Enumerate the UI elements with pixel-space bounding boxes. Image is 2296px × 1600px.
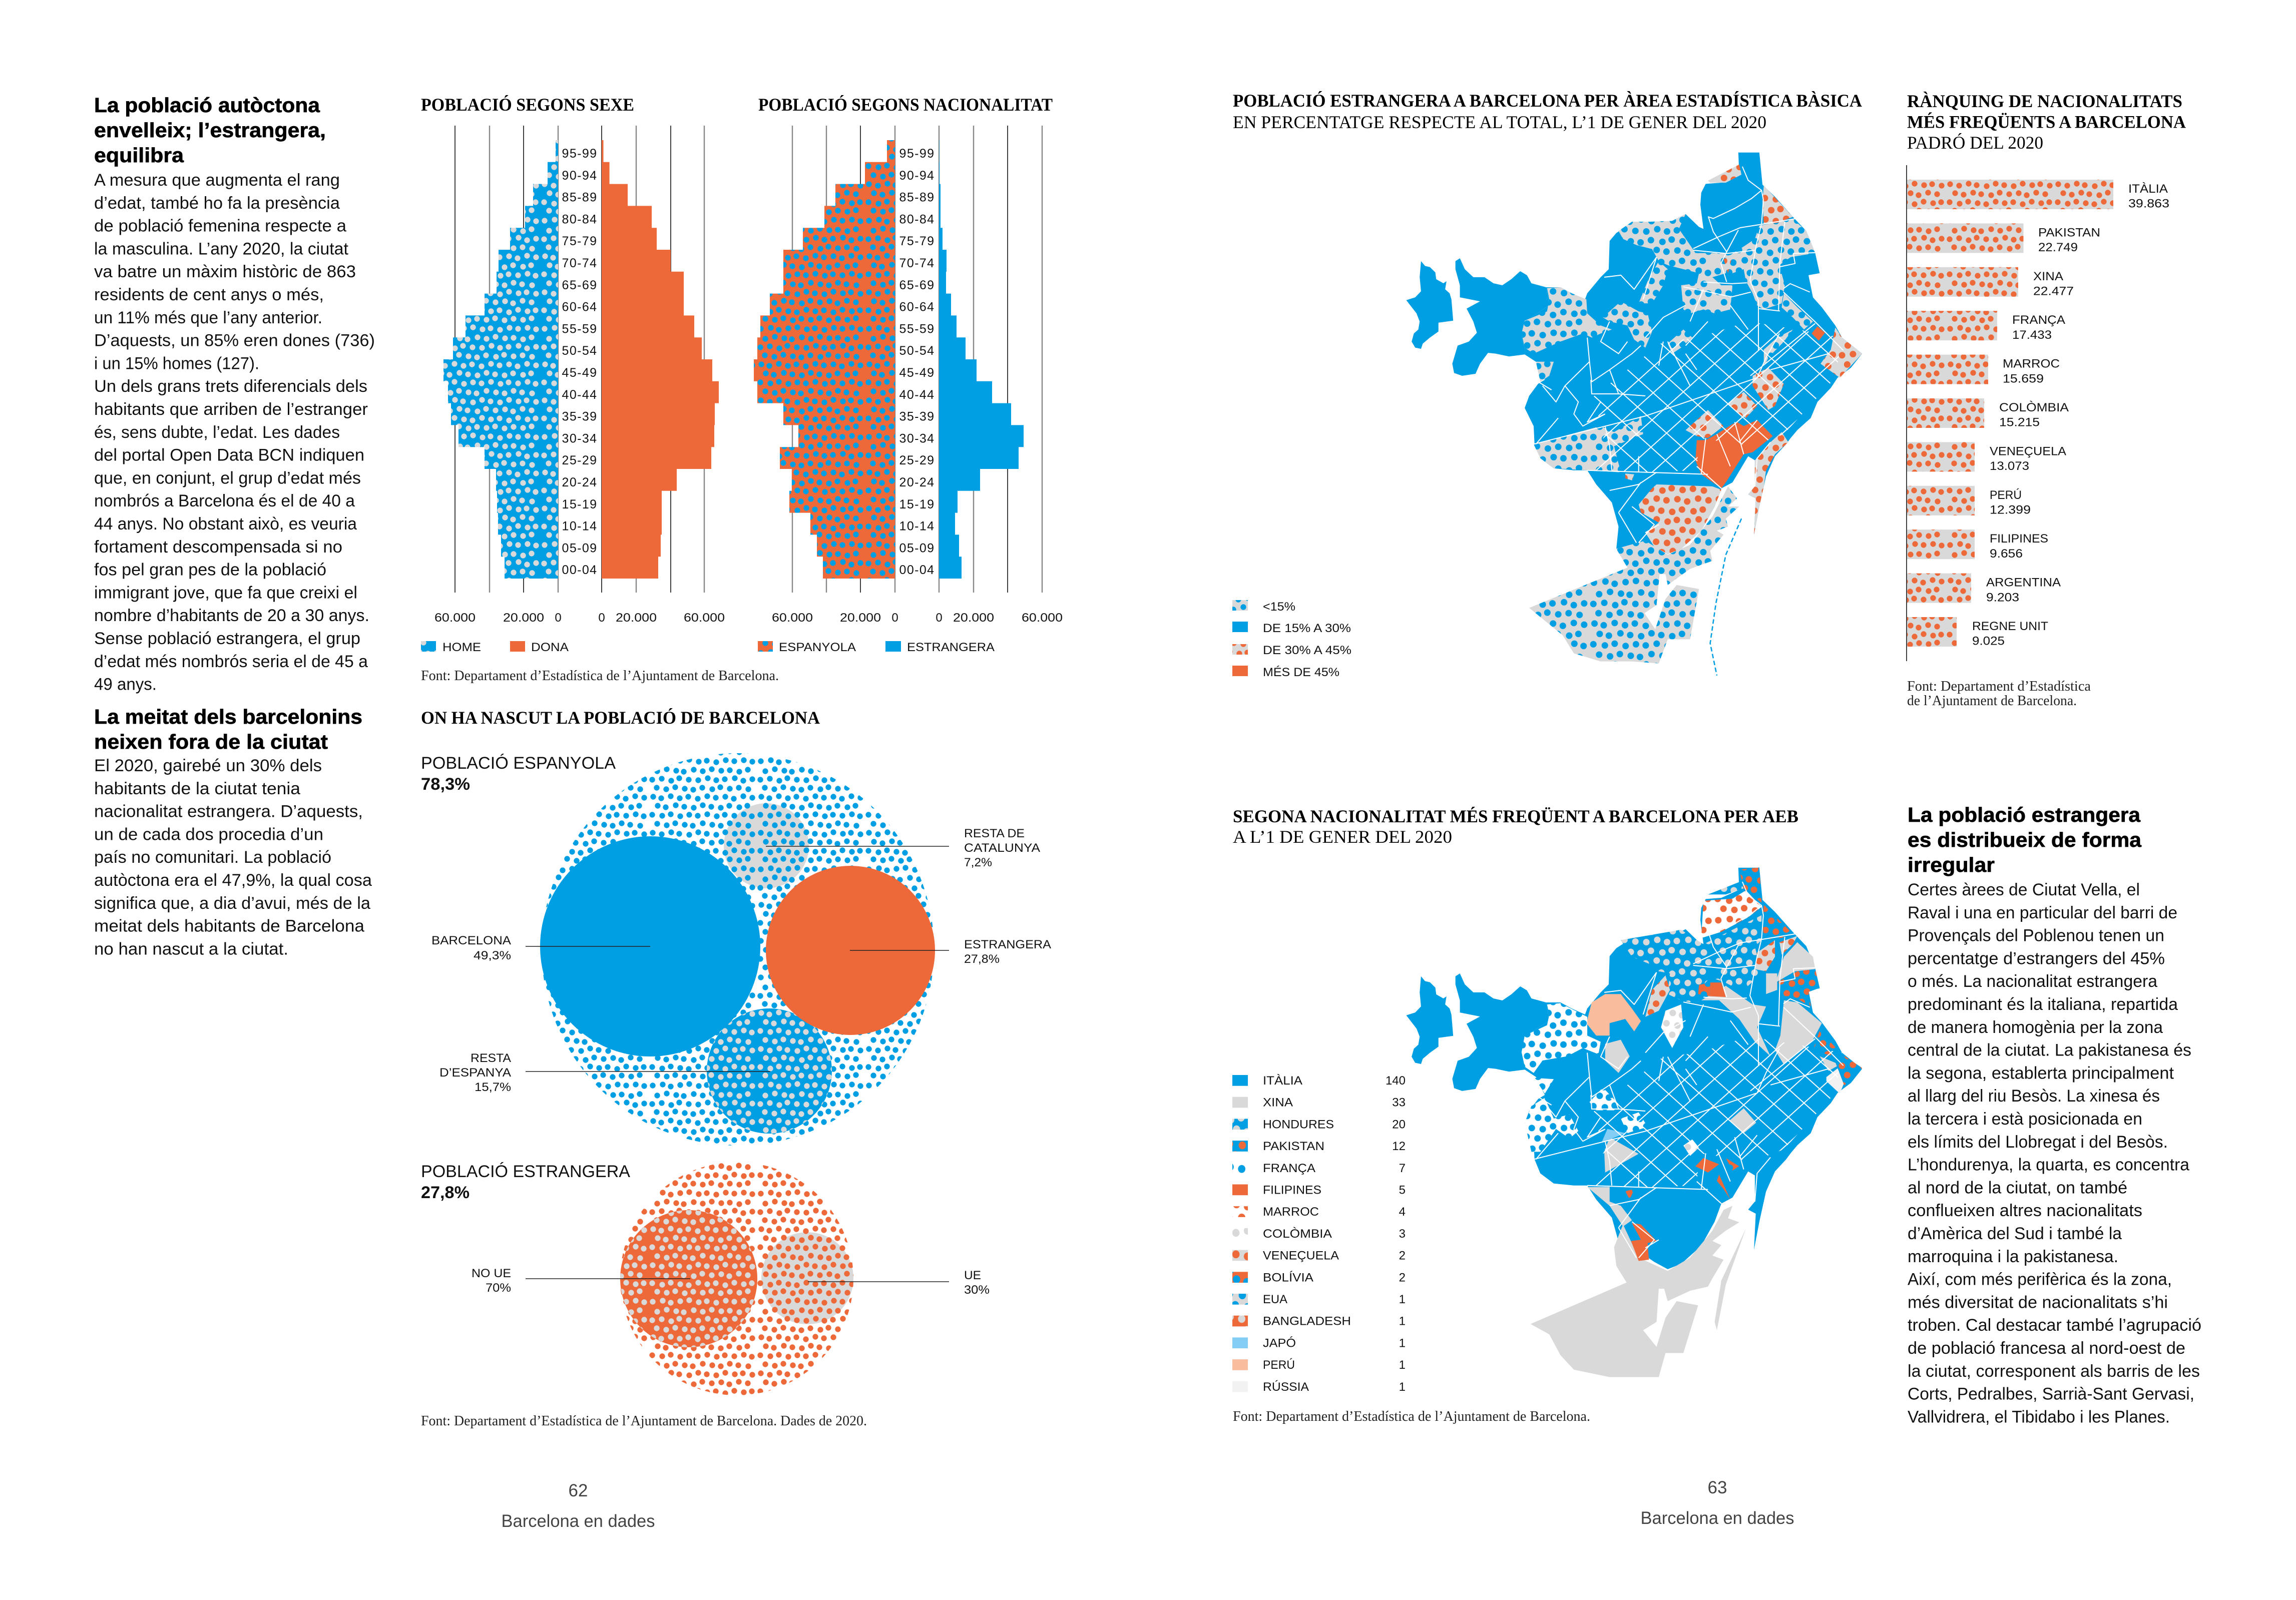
text block: autòctona: del portal Open Data BCN indiquen [94, 446, 364, 465]
age labels: 60-64 [899, 300, 935, 314]
text block: autòctona: de població femenina respecte a [94, 217, 346, 236]
legend: map 2: 33 [1392, 1096, 1406, 1110]
age labels: 35-39 [899, 410, 935, 424]
heading: La meitat dels barcelonins: La meitat dels barcelonins [94, 705, 362, 728]
label: resta de catalunya: RESTA DE [964, 827, 1025, 840]
label: resta de catalunya: 7,2% [964, 856, 992, 869]
source: ranking: de l’Ajuntament de Barcelona. [1907, 693, 2077, 709]
text block: autòctona: residents de cent anys o més, [94, 285, 324, 304]
label: resta d'espanya: D’ESPANYA [439, 1066, 511, 1080]
text block: distribució: predominant és la italiana, repartida [1908, 995, 2178, 1014]
legend: sexe: DONA [531, 641, 569, 654]
axis labels: 60.000 [1022, 611, 1063, 625]
legend: map 2: COLÒMBIA [1263, 1227, 1332, 1241]
text block: autòctona: D’aquests, un 85% eren dones (736) [94, 331, 375, 350]
heading: La població estrangera: La població estrangera [1908, 803, 2141, 826]
legend: map 2: 1 [1399, 1315, 1406, 1328]
label: barcelona [431, 934, 511, 962]
label: resta de catalunya: CATALUNYA [964, 841, 1040, 855]
bubble chart: població estrangera [526, 1162, 949, 1395]
axis labels: 60.000 [434, 611, 476, 625]
text block: distribució: o més. La nacionalitat estrangera [1908, 972, 2157, 991]
title: map 2: SEGONA NACIONALITAT MÉS FREQÜENT A BARCELONA PER AEB [1233, 806, 1798, 826]
choropleth map: second nationality [1406, 811, 1887, 1469]
legend: map 2: PERÚ [1263, 1358, 1295, 1372]
heading: La població estrangera: es distribueix de forma [1908, 828, 2142, 851]
bar labels: FILIPINES [1990, 532, 2048, 546]
age labels: 40-44 [562, 388, 597, 402]
text block: meitat: un de cada dos procedia d’un [94, 825, 323, 844]
legend: map 2: RÚSSIA [1263, 1380, 1309, 1394]
text block: meitat: significa que, a dia d’avui, més de la [94, 894, 370, 913]
legend: map 1: MÉS DE 45% [1263, 666, 1339, 679]
text block: distribució: Provençals del Poblenou tenen un [1908, 926, 2164, 945]
panel: text column left [94, 94, 375, 958]
age labels: 75-79 [899, 234, 935, 248]
bar labels: 22.477 [2033, 284, 2074, 298]
text block: autòctona: Sense població estrangera, el grup [94, 629, 360, 648]
age labels: 40-44 [899, 388, 935, 402]
label: barcelona: BARCELONA [431, 934, 511, 947]
bar labels: 15.659 [2003, 372, 2044, 385]
legend: map 2: 5 [1399, 1183, 1406, 1197]
label: barcelona: 49,3% [474, 949, 511, 962]
label: resta d'espanya: RESTA [471, 1051, 511, 1065]
age labels: 05-09 [562, 541, 597, 555]
text block: meitat: nacionalitat estrangera. D’aquests, [94, 802, 363, 821]
bubble: resta d'espanya [707, 1008, 832, 1134]
heading: població estrangera: POBLACIÓ ESTRANGERA [421, 1162, 630, 1181]
age labels: 70-74 [562, 256, 597, 270]
bubble: ue [761, 1232, 853, 1324]
source: map 2: Font: Departament d’Estadística de l’Ajuntament de Barcelona. [1233, 1408, 1590, 1424]
text block: autòctona: habitants que arriben de l’estranger [94, 400, 368, 419]
text block: autòctona: fortament descompensada si no [94, 538, 342, 557]
legend: map 2: VENEÇUELA [1263, 1249, 1339, 1263]
text block: autòctona: nombrós a Barcelona és el de 40 a [94, 491, 355, 510]
bar labels: 13.073 [1990, 459, 2029, 473]
title: map 1 [1233, 91, 1862, 132]
title: map 1: POBLACIÓ ESTRANGERA A BARCELONA PER ÀREA ESTADÍSTICA BÀSICA [1233, 91, 1862, 111]
text block: distribució [1908, 880, 2201, 1426]
text block: autòctona [94, 171, 375, 694]
label: ue: 30% [964, 1283, 990, 1297]
bubble: barcelona [540, 836, 760, 1056]
age labels: 65-69 [899, 278, 935, 292]
title: població segons sexe: POBLACIÓ SEGONS SEXE [421, 95, 634, 115]
axis labels: 20.000 [840, 611, 881, 625]
heading: La meitat dels barcelonins: neixen fora de la ciutat [94, 730, 328, 753]
bar labels: VENEÇUELA [1990, 444, 2066, 458]
age labels: 15-19 [899, 497, 935, 511]
age labels: 70-74 [899, 256, 935, 270]
age labels: 95-99 [562, 147, 597, 161]
legend: map 2: 1 [1399, 1293, 1406, 1306]
text block: autòctona: 44 anys. No obstant això, es veuria [94, 514, 357, 534]
text block: autòctona: immigrant jove, que fa que creixi el [94, 583, 357, 602]
axis labels: 20.000 [616, 611, 657, 625]
age labels: 60-64 [562, 300, 597, 314]
legend: map 2: 3 [1399, 1227, 1406, 1241]
legend: map 2: 2 [1399, 1271, 1406, 1284]
label: no ue [472, 1267, 511, 1295]
text block: distribució: Certes àrees de Ciutat Vella, el [1908, 880, 2140, 899]
text block: distribució: conflueixen altres nacionalitats [1908, 1201, 2142, 1220]
bar labels: PAKISTAN [2038, 226, 2100, 239]
bar labels: ARGENTINA [1986, 576, 2061, 590]
bar labels: COLÒMBIA [1999, 401, 2069, 414]
legend: map 2: BANGLADESH [1263, 1315, 1351, 1328]
panel: pyramid by nationality [754, 95, 1063, 654]
panel: pyramid by sex [421, 95, 725, 654]
axis labels: 0 [598, 611, 605, 625]
legend: map 2: 1 [1399, 1358, 1406, 1372]
bar chart: nationalities [1907, 165, 2169, 661]
age labels [562, 147, 597, 577]
label: no ue: NO UE [472, 1267, 511, 1280]
panel: on ha nascut [421, 708, 1051, 1429]
legend: map 2: 140 [1386, 1074, 1406, 1088]
bar labels: 9.025 [1972, 635, 2005, 648]
legend: map 1: DE 30% A 45% [1263, 644, 1351, 657]
text block: meitat [94, 756, 372, 958]
text block: autòctona: 49 anys. [94, 675, 157, 694]
legend: map 2: 12 [1392, 1140, 1406, 1153]
bar labels [1972, 182, 2169, 648]
bars: estrangera [939, 140, 1024, 579]
axis labels: 0 [891, 611, 898, 625]
title: map 1: EN PERCENTATGE RESPECTE AL TOTAL, L’1 DE GENER DEL 2020 [1233, 112, 1766, 132]
text block: distribució: d’Amèrica del Sud i també la [1908, 1224, 2122, 1243]
age labels: 05-09 [899, 541, 935, 555]
legend: map 2: MARROC [1263, 1205, 1319, 1219]
bar labels: 22.749 [2038, 241, 2078, 254]
bar labels: PERÚ [1990, 488, 2022, 502]
text block: distribució: al llarg del riu Besòs. La xinesa és [1908, 1087, 2160, 1106]
title: rànquing [1907, 91, 2186, 153]
text block: distribució: de població francesa al nord-oest de [1908, 1339, 2185, 1358]
panel: map second nationality [1232, 806, 1887, 1469]
bar labels: REGNE UNIT [1972, 620, 2048, 633]
legend: map 2: 1 [1399, 1336, 1406, 1350]
age labels: 00-04 [562, 563, 597, 577]
title: rànquing: MÉS FREQÜENTS A BARCELONA [1907, 112, 2186, 132]
heading: població estrangera [421, 1162, 630, 1202]
text block: distribució: L’hondurenya, la quarta, es concentra [1908, 1156, 2189, 1175]
axis labels: 20.000 [953, 611, 994, 625]
pyramid chart: sexe [434, 126, 725, 625]
text block: meitat: no han nascut a la ciutat. [94, 939, 288, 958]
text block: autòctona: un 11% més que l’any anterior. [94, 308, 322, 327]
text block: distribució: la ciutat, corresponent als barris de les [1908, 1362, 2200, 1381]
legend: map 2: HONDURES [1263, 1118, 1334, 1131]
heading: població espanyola: POBLACIÓ ESPANYOLA [421, 754, 616, 773]
heading: La meitat dels barcelonins [94, 705, 362, 753]
page number left [502, 1481, 655, 1531]
legend: map 2: EUA [1263, 1293, 1287, 1306]
text block: distribució: de manera homogènia per la zona [1908, 1018, 2163, 1037]
age labels: 55-59 [899, 322, 935, 336]
legend: map 2: 7 [1399, 1162, 1406, 1175]
bar labels: ITÀLIA [2128, 182, 2168, 196]
text block: autòctona: va batre un màxim històric de 863 [94, 262, 356, 281]
panel: map foreign population [1232, 91, 1887, 754]
age labels: 10-14 [562, 519, 597, 534]
source: ranking [1907, 678, 2091, 709]
text block: meitat: autòctona era el 47,9%, la qual cosa [94, 871, 372, 890]
axis labels: 0 [555, 611, 562, 625]
label: resta de catalunya [964, 827, 1040, 869]
legend: map 1: <15% [1263, 600, 1295, 614]
age labels: 25-29 [899, 453, 935, 467]
legend: map 2: PAKISTAN [1263, 1140, 1324, 1153]
legend: map 1: DE 15% A 30% [1263, 622, 1351, 635]
legend: map 2: 4 [1399, 1205, 1406, 1219]
text block: distribució: marroquina i la pakistanesa. [1908, 1247, 2118, 1266]
age labels: 80-84 [562, 212, 597, 226]
legend: map 2: 2 [1399, 1249, 1406, 1263]
legend: nacionalitat: ESPANYOLA [779, 641, 856, 654]
text block: meitat: El 2020, gairebé un 30% dels [94, 756, 322, 775]
text block: autòctona: d’edat més nombrós seria el de 45 a [94, 652, 368, 671]
text block: meitat: meitat dels habitants de Barcelona [94, 917, 364, 936]
title: map 2 [1233, 806, 1798, 847]
age labels: 20-24 [562, 475, 597, 489]
bubble: no ue [620, 1210, 757, 1347]
axis labels: 20.000 [503, 611, 544, 625]
age labels: 25-29 [562, 453, 597, 467]
heading: La població autòctona: La població autòctona [94, 94, 320, 117]
axis labels: 0 [936, 611, 943, 625]
text block: distribució: al nord de la ciutat, on també [1908, 1178, 2127, 1197]
text block: autòctona: d’edat, també ho fa la presència [94, 194, 340, 213]
legend: map 2: JAPÓ [1263, 1336, 1296, 1350]
age labels: 45-49 [899, 366, 935, 380]
text block: meitat: país no comunitari. La població [94, 848, 331, 867]
bar labels: 15.215 [1999, 416, 2040, 429]
text block: distribució: percentatge d’estrangers del 45% [1908, 949, 2165, 968]
legend: nacionalitat [758, 641, 995, 654]
choropleth map: foreign population share [1406, 96, 1887, 754]
age labels: 45-49 [562, 366, 597, 380]
title: rànquing: RÀNQUING DE NACIONALITATS [1907, 91, 2182, 111]
text block: autòctona: és, sens dubte, l’edat. Les dades [94, 423, 340, 442]
age labels: 50-54 [562, 344, 597, 358]
bars: dona [602, 140, 719, 579]
panel: ranking of nationalities [1907, 91, 2186, 709]
text block: distribució: Raval i una en particular del barri de [1908, 903, 2177, 922]
age labels: 75-79 [562, 234, 597, 248]
text block: distribució: els límits del Llobregat i del Besòs. [1908, 1133, 2168, 1152]
label: no ue: 70% [486, 1281, 511, 1295]
heading: La població autòctona: equilibra [94, 144, 184, 167]
heading: La població autòctona [94, 94, 326, 167]
text block: distribució: Així, com més perifèrica és la zona, [1908, 1270, 2172, 1289]
legend: map 2: ITÀLIA [1263, 1074, 1302, 1088]
label: estrangera: ESTRANGERA [964, 938, 1051, 951]
label: estrangera [964, 938, 1051, 966]
text block: autòctona: Un dels grans trets diferencials dels [94, 377, 367, 396]
age labels: 30-34 [899, 431, 935, 445]
pyramid chart: nacionalitat [754, 126, 1063, 625]
age labels: 50-54 [899, 344, 935, 358]
text block: distribució: la segona, establerta principalment [1908, 1063, 2174, 1083]
page number left: 62 [569, 1481, 588, 1500]
age labels: 30-34 [562, 431, 597, 445]
age labels: 15-19 [562, 497, 597, 511]
heading: població espanyola: 78,3% [421, 775, 470, 794]
text block: autòctona: A mesura que augmenta el rang [94, 171, 340, 190]
label: resta d'espanya: 15,7% [475, 1081, 511, 1094]
label: ue: UE [964, 1269, 981, 1282]
bars: home [443, 140, 558, 579]
axis labels: 60.000 [772, 611, 813, 625]
text block: autòctona: la masculina. L’any 2020, la ciutat [94, 239, 349, 258]
title: població segons nacionalitat: POBLACIÓ SEGONS NACIONALITAT [758, 95, 1053, 115]
source: pyramids: Font: Departament d’Estadística de l’Ajuntament de Barcelona. [421, 668, 779, 684]
bars: espanyola [754, 140, 895, 579]
age labels: 20-24 [899, 475, 935, 489]
age labels: 00-04 [899, 563, 935, 577]
heading: La població autòctona: envelleix; l’estrangera, [94, 119, 326, 142]
legend: map 2: FILIPINES [1263, 1183, 1321, 1197]
heading: La població estrangera [1908, 803, 2142, 876]
page number right: 63 [1708, 1478, 1727, 1497]
heading: població espanyola [421, 754, 616, 794]
legend: sexe [421, 641, 569, 654]
bar labels: 12.399 [1990, 503, 2031, 516]
bar labels: 17.433 [2012, 328, 2052, 342]
heading: població estrangera: 27,8% [421, 1183, 470, 1202]
legend: map 2: BOLÍVIA [1263, 1271, 1313, 1284]
text block: autòctona: nombre d’habitants de 20 a 30 anys. [94, 606, 369, 625]
text block: distribució: la tercera i està posicionada en [1908, 1110, 2142, 1129]
bar labels: 9.656 [1990, 547, 2023, 561]
age labels: 55-59 [562, 322, 597, 336]
bar labels: MARROC [2003, 357, 2060, 371]
title: map 2: A L’1 DE GENER DEL 2020 [1233, 827, 1452, 847]
label: estrangera: 27,8% [964, 952, 1000, 966]
legend: map 1 [1232, 600, 1351, 679]
title: on ha nascut: ON HA NASCUT LA POBLACIÓ DE BARCELONA [421, 708, 820, 728]
legend: map 2: FRANÇA [1263, 1162, 1315, 1175]
text block: autòctona: fos pel gran pes de la població [94, 561, 326, 580]
text block: distribució: troben. Cal destacar també l’agrupació [1908, 1316, 2201, 1335]
title: rànquing: PADRÓ DEL 2020 [1907, 133, 2043, 153]
axis labels [434, 611, 725, 625]
text block: distribució: Corts, Pedralbes, Sarrià-Sant Gervasi, [1908, 1385, 2194, 1404]
text block: distribució: més diversitat de nacionalitats s’hi [1908, 1293, 2168, 1312]
page number left: Barcelona en dades [502, 1511, 655, 1531]
text block: autòctona: que, en conjunt, el grup d’edat més [94, 468, 361, 487]
age labels: 90-94 [899, 169, 935, 183]
label: ue [964, 1269, 990, 1297]
text block: meitat: habitants de la ciutat tenia [94, 779, 300, 798]
text block: distribució: central de la ciutat. La pakistanesa és [1908, 1041, 2191, 1060]
legend: map 2: 20 [1392, 1118, 1406, 1131]
age labels: 85-89 [899, 191, 935, 205]
legend: map 2: 1 [1399, 1380, 1406, 1394]
bar labels: XINA [2033, 270, 2063, 283]
bubble chart: població espanyola [526, 753, 949, 1146]
bar labels: FRANÇA [2012, 313, 2065, 327]
age labels: 80-84 [899, 212, 935, 226]
bar labels: 9.203 [1986, 591, 2019, 604]
age labels: 10-14 [899, 519, 935, 534]
axis labels: 60.000 [684, 611, 725, 625]
source: ranking: Font: Departament d’Estadística [1907, 678, 2091, 694]
source: bubbles: Font: Departament d’Estadística de l’Ajuntament de Barcelona. Dades de 2020. [421, 1413, 867, 1429]
age labels: 90-94 [562, 169, 597, 183]
age labels: 65-69 [562, 278, 597, 292]
age labels [899, 147, 935, 577]
legend: nacionalitat: ESTRANGERA [907, 641, 995, 654]
text block: distribució: Vallvidrera, el Tibidabo i les Planes. [1908, 1407, 2170, 1426]
age labels: 95-99 [899, 147, 935, 161]
page number right [1641, 1478, 1794, 1528]
legend: sexe: HOME [442, 641, 481, 654]
legend: map 2: XINA [1263, 1096, 1293, 1110]
bar labels: 39.863 [2128, 197, 2169, 211]
bubble: resta de catalunya [724, 803, 809, 888]
age labels: 85-89 [562, 191, 597, 205]
text block: autòctona: i un 15% homes (127). [94, 354, 259, 373]
page number right: Barcelona en dades [1641, 1508, 1794, 1528]
label: resta d'espanya [439, 1051, 511, 1094]
axis labels [772, 611, 1063, 625]
age labels: 35-39 [562, 410, 597, 424]
heading: La població estrangera: irregular [1908, 853, 1995, 876]
panel: text column right [1908, 803, 2201, 1426]
legend: map 2 [1232, 1074, 1406, 1394]
bubble: estrangera [766, 866, 935, 1035]
